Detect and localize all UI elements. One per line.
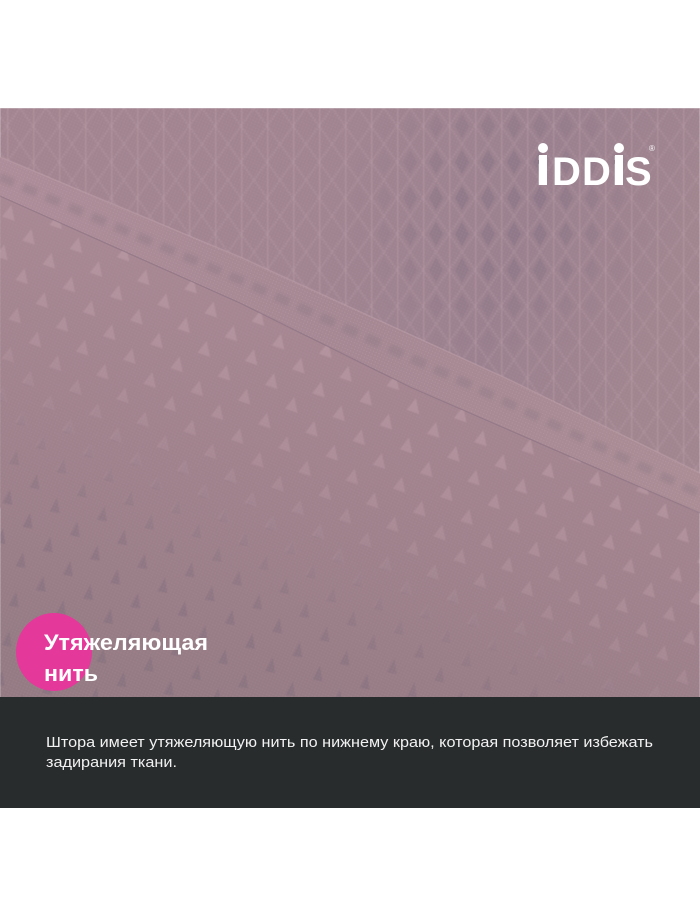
folded hem band: [0, 157, 700, 513]
photo: pink waffle fabric with weighted hem: [0, 108, 700, 700]
heading: weighted thread: Утяжеляющая: [44, 630, 208, 655]
dark caption panel: [0, 697, 700, 808]
caption text: Штора имеет утяжеляющую нить по нижнему краю, которая позволяет избежать: [46, 734, 653, 751]
upper curtain layer: [0, 108, 700, 508]
heading: weighted thread: [44, 630, 208, 686]
infographic canvas: [0, 108, 700, 808]
caption text: задирания ткани.: [46, 754, 177, 771]
caption text: [46, 734, 653, 771]
logo registered mark: ®: [649, 144, 655, 153]
heading: weighted thread: нить: [44, 661, 98, 686]
lower curtain layer: [0, 190, 700, 700]
pink accent circle: [16, 613, 92, 691]
logo: IDDIS: iDDiS: [536, 150, 652, 194]
